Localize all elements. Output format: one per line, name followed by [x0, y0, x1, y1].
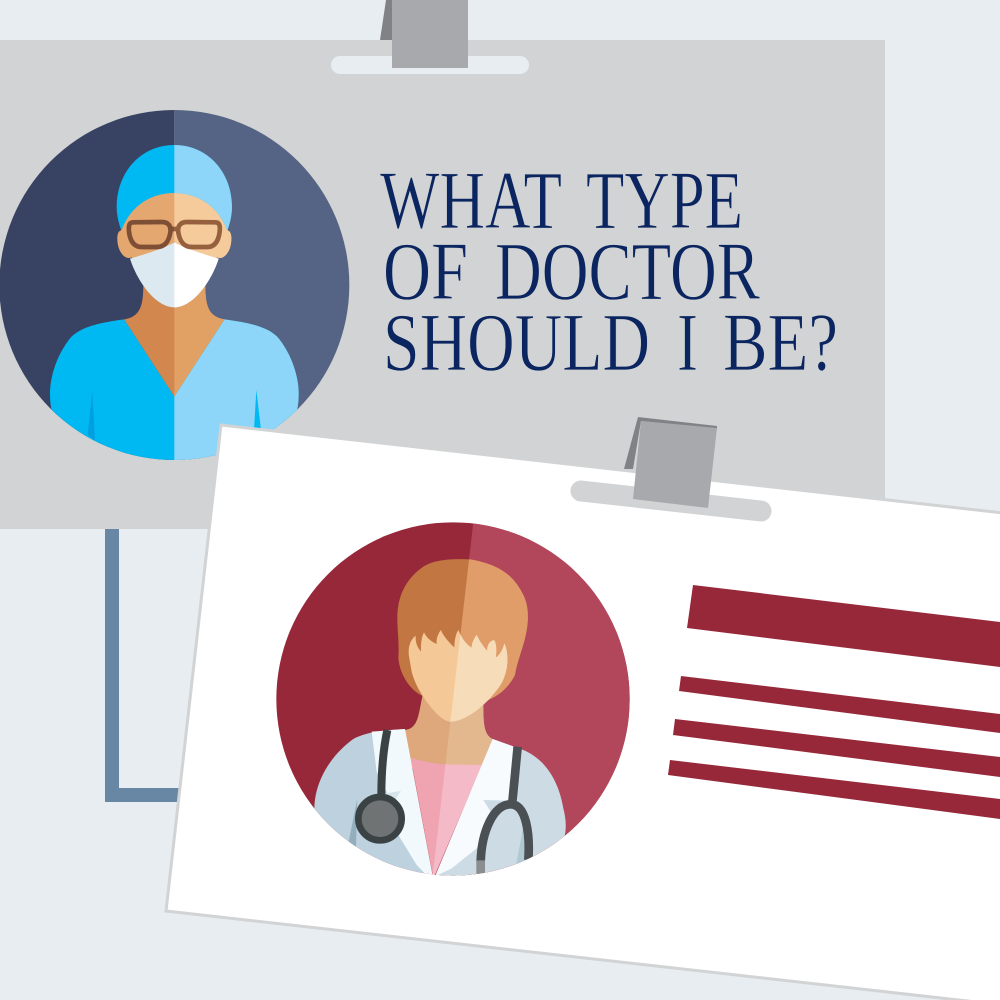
- portrait background: [276, 522, 630, 876]
- face and fringe: [409, 630, 507, 722]
- neck: [405, 695, 493, 768]
- coat right: [436, 739, 566, 876]
- badge panel: [0, 40, 885, 529]
- neck: [124, 283, 225, 397]
- title: WHAT: [380, 154, 562, 246]
- detail line 1: [679, 676, 1000, 733]
- title: TYPE: [586, 154, 743, 246]
- title: BE?: [723, 296, 838, 388]
- doctor portrait: [276, 522, 630, 876]
- title: [380, 154, 838, 388]
- scrubs: [50, 319, 299, 460]
- coat left: [314, 729, 426, 874]
- scrubs fold left: [88, 390, 95, 441]
- face mask: [130, 243, 219, 307]
- surgical cap: [117, 145, 232, 231]
- title: I: [677, 296, 698, 388]
- scrubs fold right: [254, 390, 261, 430]
- collar tab left: [386, 791, 401, 799]
- badge panel: [166, 425, 1000, 1000]
- hair: [397, 559, 528, 702]
- coat shadows: [348, 798, 525, 865]
- title: OF: [383, 225, 468, 317]
- lapel left: [372, 729, 433, 876]
- badge slot: [331, 56, 529, 74]
- title: DOCTOR: [495, 225, 760, 317]
- surgeon portrait: [0, 100, 361, 467]
- detail line 2: [673, 719, 1000, 777]
- badge clip: [624, 417, 717, 508]
- detail line 3: [668, 760, 1000, 819]
- lanyard line: [112, 525, 185, 795]
- front badge: doctor: [166, 417, 1000, 1000]
- badge slot: [581, 491, 761, 511]
- badge clip: [380, 0, 468, 68]
- shirt: [411, 758, 482, 878]
- lapel right: [435, 739, 517, 876]
- portrait background: [0, 100, 361, 467]
- name bar: [687, 585, 1000, 667]
- glasses: [129, 222, 220, 247]
- stethoscope: [358, 730, 529, 878]
- back badge: surgeon: [0, 0, 885, 529]
- title: SHOULD: [383, 296, 650, 388]
- head and ears: [117, 193, 232, 258]
